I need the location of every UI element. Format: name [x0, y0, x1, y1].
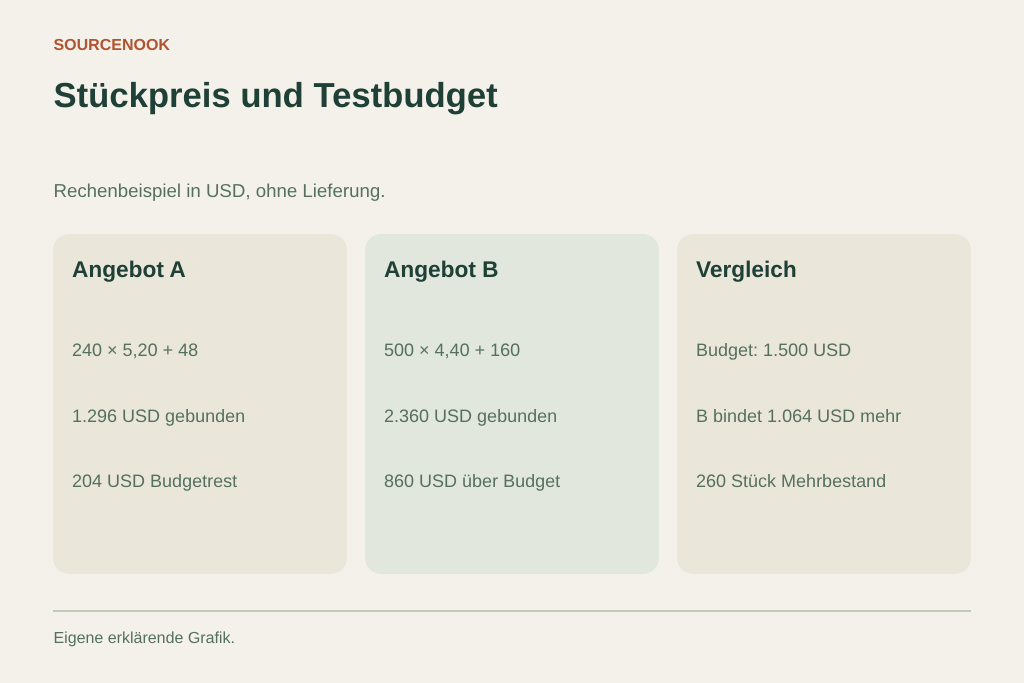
line: calculation B: 500 × 4,40 + 160 [384, 340, 520, 360]
line: bound A: 1.296 USD gebunden [72, 406, 245, 426]
footer note: Eigene erklärende Grafik. [54, 630, 235, 647]
title: Stückpreis und Testbudget [54, 76, 498, 114]
line: over budget B: 860 USD über Budget [384, 471, 560, 491]
line: difference: B bindet 1.064 USD mehr [696, 406, 901, 426]
heading: Angebot B: Angebot B [384, 256, 499, 282]
line: calculation A: 240 × 5,20 + 48 [72, 340, 198, 360]
brand label: SOURCENOOK [54, 36, 170, 54]
panel: Angebot B [365, 234, 659, 574]
panel: Angebot A [53, 234, 347, 574]
heading: Vergleich: Vergleich [696, 256, 797, 282]
line: bound B: 2.360 USD gebunden [384, 406, 557, 426]
line: budget: Budget: 1.500 USD [696, 340, 851, 360]
heading: Angebot A: Angebot A [72, 256, 186, 282]
subtitle: Rechenbeispiel in USD, ohne Lieferung. [54, 180, 385, 201]
line: remaining budget A: 204 USD Budgetrest [72, 471, 237, 491]
line: extra stock: 260 Stück Mehrbestand [696, 471, 886, 491]
panel: Vergleich [677, 234, 971, 574]
